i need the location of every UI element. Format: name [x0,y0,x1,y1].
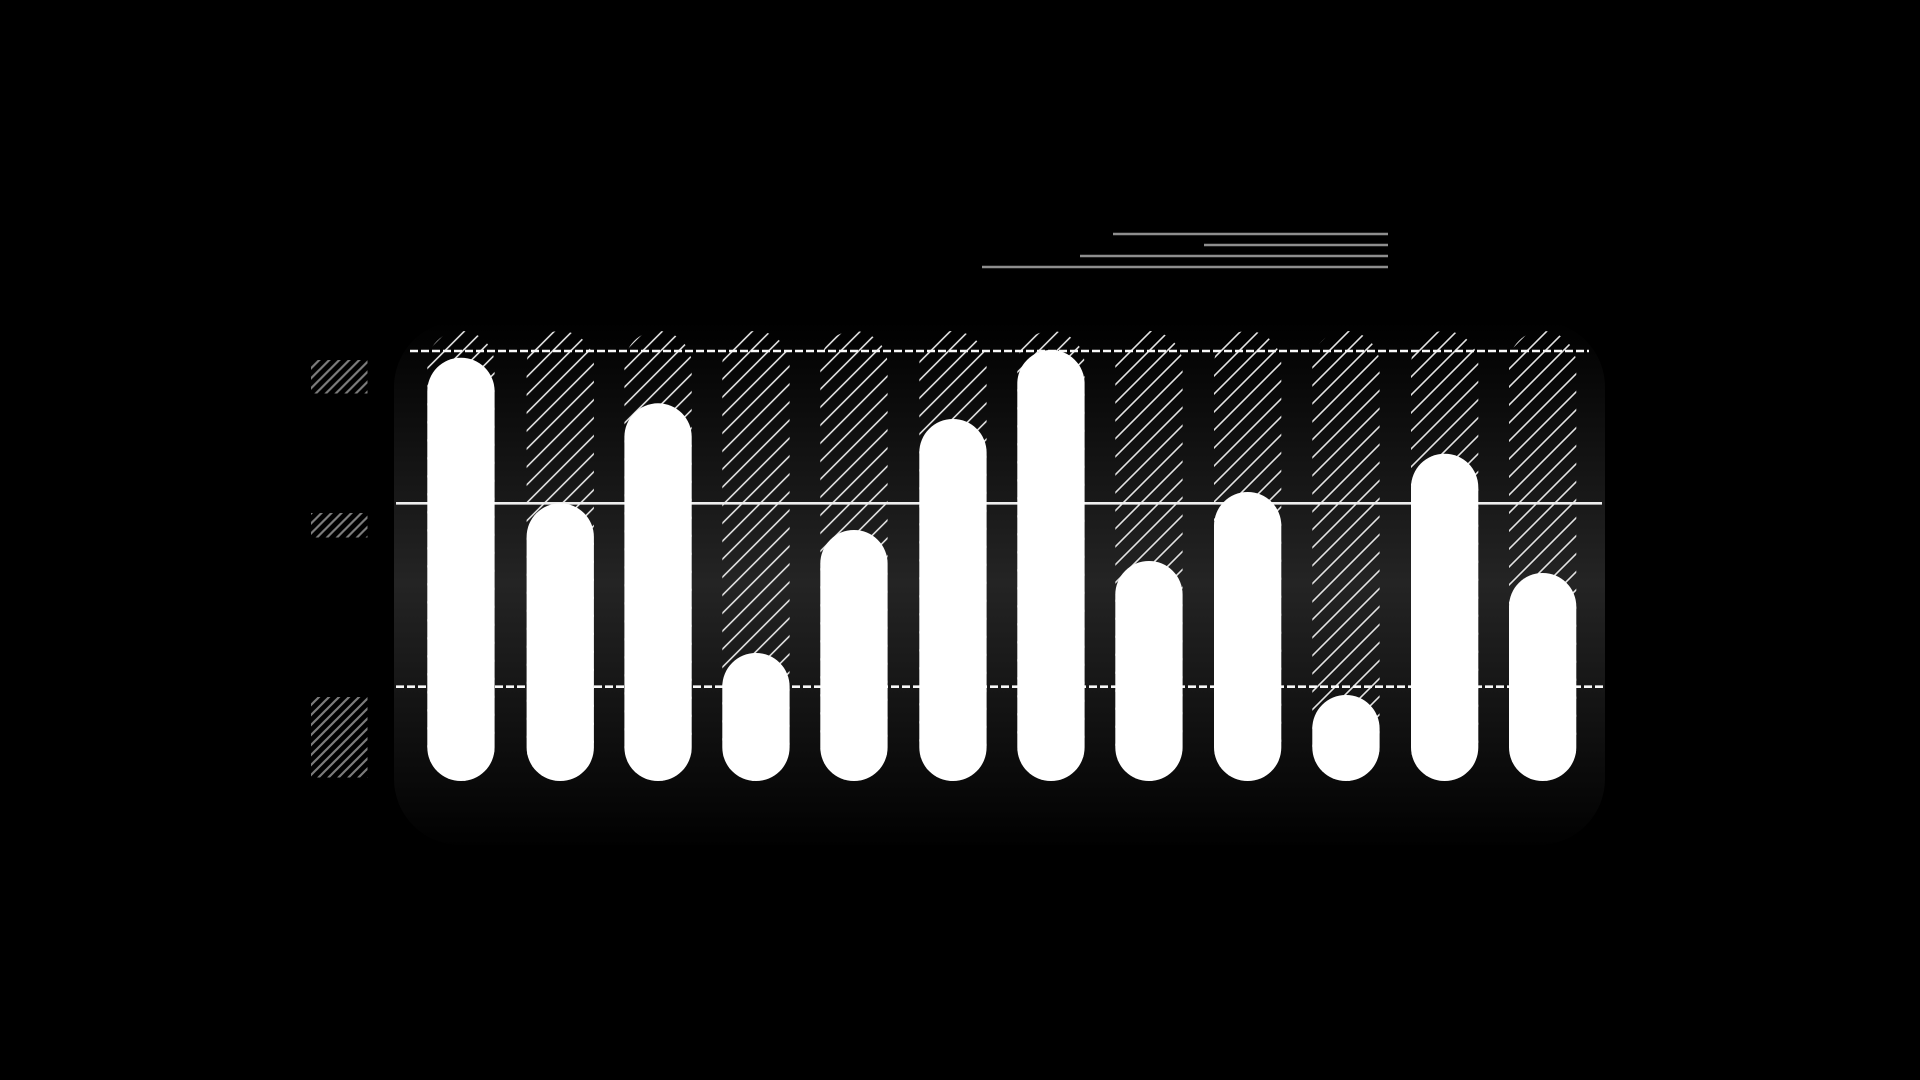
legend swatch: top [311,360,368,394]
chart panel background [394,321,1605,845]
legend swatch: middle [311,513,368,538]
legend: hatched swatches [311,360,368,778]
legend swatch: bottom [311,697,368,778]
upper dashed reference line [410,350,1589,352]
solid average line [396,502,1602,505]
white capsule bars [427,350,1576,781]
lower dashed reference line [396,685,1604,688]
hatched background columns [427,331,1576,781]
top right horizontal rule lines [982,234,1388,267]
